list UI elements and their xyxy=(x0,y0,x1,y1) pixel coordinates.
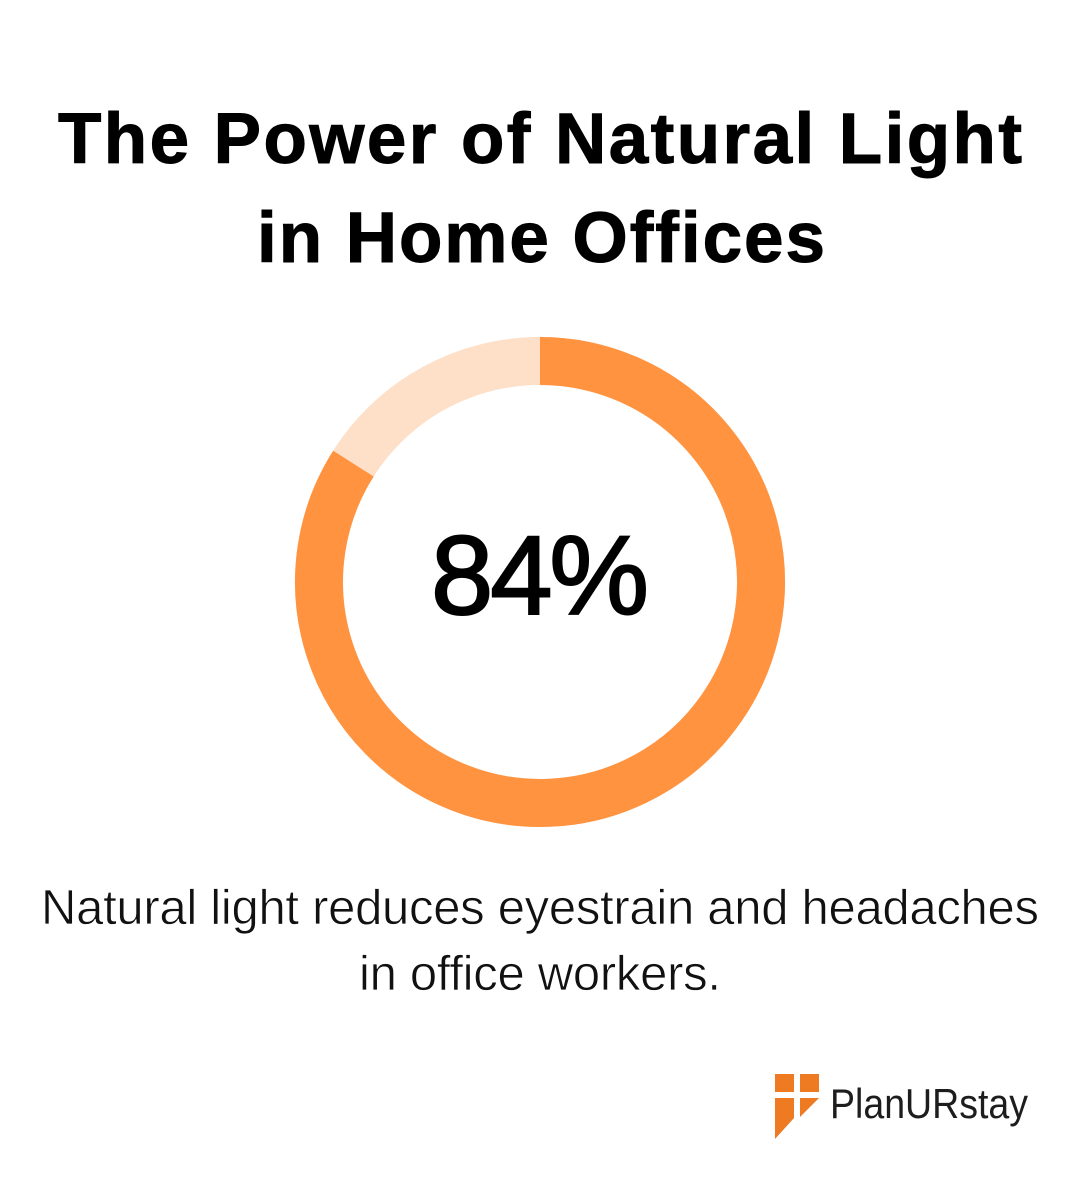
highlighted segment xyxy=(319,361,761,803)
logo: PlanURstay xyxy=(775,1074,1028,1139)
title: The Power of Natural Light xyxy=(58,100,1022,179)
description text: Natural light reduces eyestrain and headaches xyxy=(41,881,1039,935)
title xyxy=(58,100,1022,278)
description text xyxy=(41,881,1039,1001)
remaining segment xyxy=(319,361,761,803)
logo icon xyxy=(775,1074,819,1139)
logo wordmark: PlanURstay xyxy=(830,1080,1028,1127)
percentage value: 84% xyxy=(431,513,649,638)
title: in Home Offices xyxy=(257,199,825,278)
description text: in office workers. xyxy=(359,947,721,1001)
donut chart: 84% xyxy=(319,361,761,803)
